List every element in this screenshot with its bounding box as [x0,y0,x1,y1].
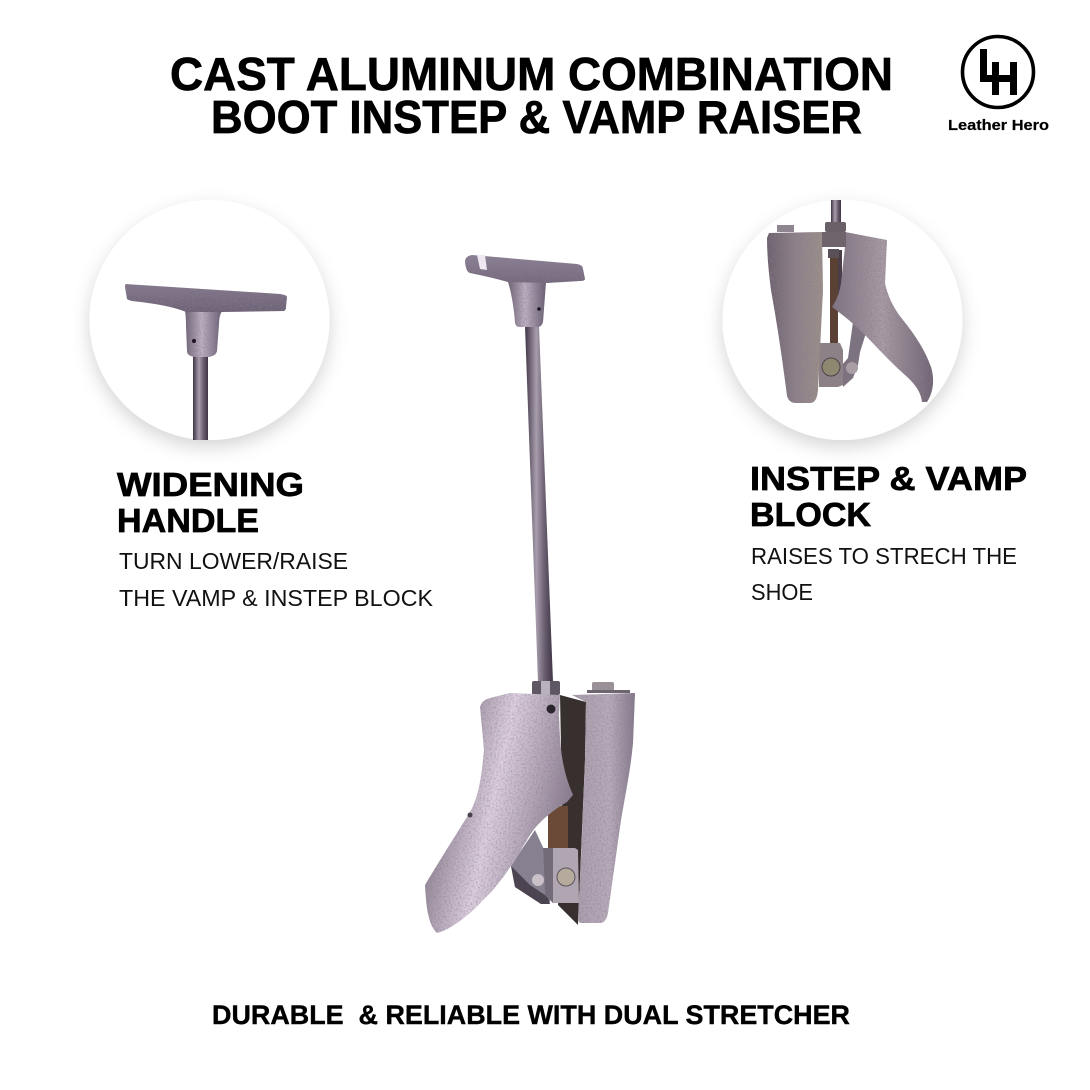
top bolt and plate [592,682,614,691]
heading: instep and vamp block: INSTEP & VAMP [750,460,1027,497]
heel block [767,232,823,403]
footer tagline: DURABLE & RELIABLE WITH DUAL STRETCHER [212,1000,850,1030]
main product: boot raiser [425,255,635,933]
logo: Leather Hero: Leather Hero [948,118,1049,134]
text: widening handle description [119,548,433,611]
boot block [832,232,933,402]
title [170,48,893,143]
top bolt [777,225,794,232]
text: instep and vamp block description: SHOE [751,579,813,605]
arm [511,830,550,904]
heading: widening handle: HANDLE [117,502,259,539]
text: instep and vamp block description [751,543,1017,605]
heading: widening handle [117,466,304,539]
panel: instep and vamp block detail circle [722,200,962,440]
screw [830,255,838,345]
text: widening handle description: THE VAMP & INSTEP BLOCK [119,585,433,611]
arm [842,322,866,387]
heading: instep and vamp block [750,460,1027,533]
heading: instep and vamp block: BLOCK [750,496,871,533]
left boot block [425,693,573,933]
heading: widening handle: WIDENING [117,466,304,503]
screw [548,806,568,848]
text: instep and vamp block description: RAISES TO STRECH THE [751,543,1017,569]
collar [825,222,846,232]
title: BOOT INSTEP & VAMP RAISER [211,91,862,143]
T-handle bar [465,255,585,283]
clamp [819,343,843,387]
clamp [543,848,579,903]
right block [572,693,635,923]
title: CAST ALUMINUM COMBINATION [170,48,893,100]
panel: handle detail circle [90,200,330,440]
rod [525,326,553,682]
text: widening handle description: TURN LOWER/RAISE [119,548,348,574]
rod [193,356,208,440]
T-handle stem [508,282,546,327]
collar [532,681,560,695]
dark band [558,695,586,925]
T-handle stem [185,311,222,357]
logo: Leather Hero [948,36,1049,134]
T-handle bar [125,284,287,312]
rod [831,200,841,224]
